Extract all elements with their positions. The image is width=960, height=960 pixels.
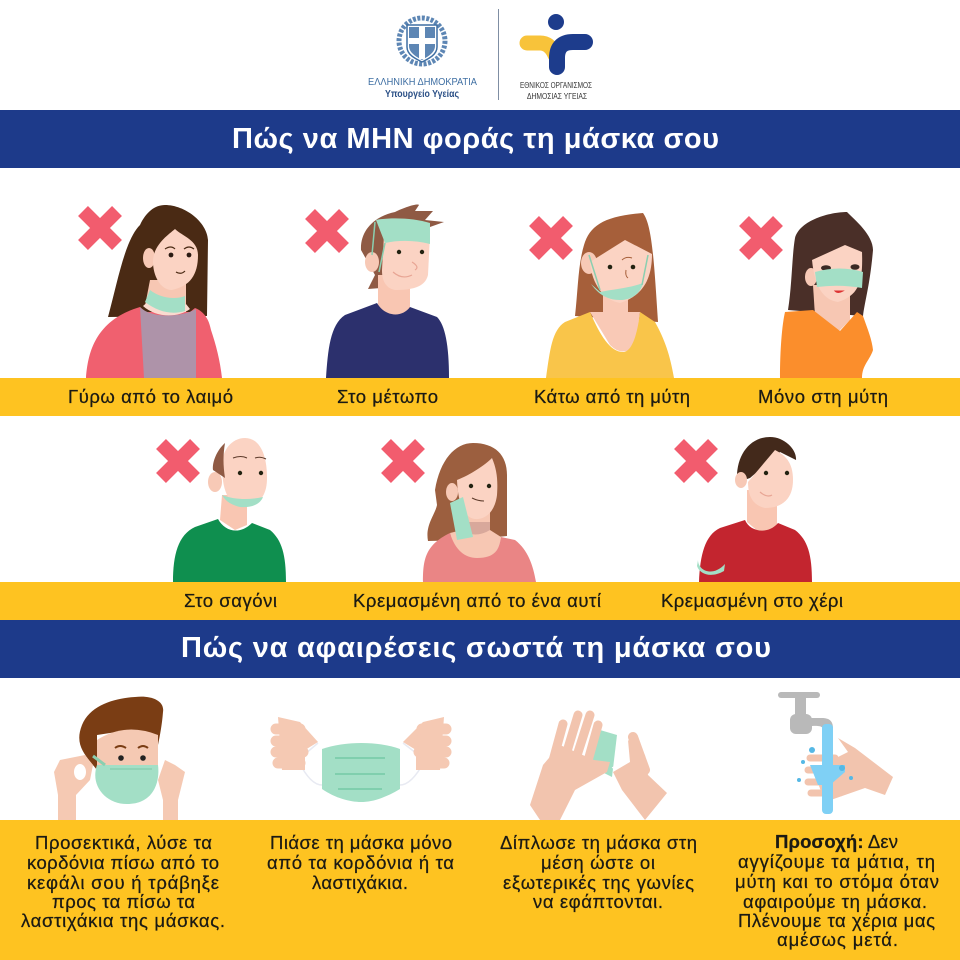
text: step 3: εξωτερικές της γωνίες [503,872,694,893]
icon: red cross [534,221,568,255]
text: step 1: κεφάλι σου ή τράβηξε [27,872,219,893]
person: mask on the arm [679,437,812,582]
text: step 1: λαστιχάκια της μάσκας. [21,910,225,931]
hanging mask [450,497,473,540]
text: step 3: μέση ώστε οι [541,852,655,873]
text: step 3 [500,832,697,912]
icon: red cross [679,444,713,478]
person: mask around the neck [83,205,222,378]
yellow label band: row 2: Στο σαγόνι [184,590,277,611]
text: step 1 [21,832,225,931]
yellow label band: row 2: Κρεμασμένη στο χέρι [661,590,843,611]
yellow label band: row 1: Μόνο στη μύτη [758,386,888,407]
text: step 3: Δίπλωσε τη μάσκα στη [500,832,697,853]
icon: red cross [386,444,420,478]
header: logos [368,9,592,101]
mask on nose [815,268,863,288]
text: step 1: Προσεκτικά, λύσε τα [35,832,212,853]
yellow label band: row 2: Κρεμασμένη από το ένα αυτί [353,590,601,611]
step 4: hand washing under tap [781,695,893,814]
text: warning: αμέσως μετά. [777,929,898,950]
mask on chin [222,495,263,507]
text: warning: αφαιρούμε τη μάσκα. [743,891,927,912]
icon: EODY logo [527,14,585,67]
step 2: hands holding mask by straps [276,717,446,802]
text: ministry name [368,76,477,100]
icon: red cross [161,444,195,478]
yellow label band: row 1: Στο μέτωπο [337,386,438,407]
step 3: hands folding mask [530,715,667,820]
yellow label band: row 1: Γύρω από το λαιμό [68,386,233,407]
step 1: man untying mask [54,697,185,820]
heading band: how not to wear [0,110,960,168]
mask below nose [591,283,643,300]
mask on forehead [376,218,430,244]
mask on neck [145,290,185,313]
text: step 2: λαστιχάκια. [312,872,408,893]
mask on arm [697,560,725,575]
text: ministry name: Υπουργείο Υγείας [385,89,459,100]
text: step 1: προς τα πίσω τα [52,891,195,912]
yellow label band: row 2 [0,582,960,620]
person: mask on the chin [161,438,286,582]
text: warning: Προσοχή: Δεν [775,831,898,852]
heading band: how to remove [0,620,960,678]
text: EODY name: ΕΘΝΙΚΟΣ ΟΡΓΑΝΙΣΜΟΣ [520,81,592,90]
icon: red cross [83,211,117,245]
person: mask under the nose [534,213,674,378]
text: step 2: Πιάσε τη μάσκα μόνο [270,832,452,853]
text: warning: αγγίζουμε τα μάτια, τη [738,851,935,872]
text: ministry name: ΕΛΛΗΝΙΚΗ ΔΗΜΟΚΡΑΤΙΑ [368,76,477,88]
text: EODY name: ΔΗΜΟΣΙΑΣ ΥΓΕΙΑΣ [527,92,587,101]
text: step 1: κορδόνια πίσω από το [27,852,219,873]
icon: Greek coat of arms [399,18,445,64]
icon: red cross [310,214,344,248]
text: step 2 [267,832,454,893]
text: warning: μύτη και το στόμα όταν [735,871,939,892]
text: step 2: από τα κορδόνια ή τα [267,852,454,873]
text: step 3: να εφάπτονται. [533,891,663,912]
heading band: how not to wear: Πώς να ΜΗΝ φοράς τη μάσκα σου [232,123,719,155]
text: warning [735,831,939,950]
yellow label band: row 1 [0,378,960,416]
person: mask hanging from one ear [386,443,536,582]
person: mask only on the nose [744,212,873,378]
text: warning: Πλένουμε τα χέρια μας [738,910,935,931]
yellow label band: row 1: Κάτω από τη μύτη [534,386,690,407]
icon: red cross [744,221,778,255]
heading band: how to remove: Πώς να αφαιρέσεις σωστά τη μάσκα σου [181,632,771,664]
text: EODY name [520,81,592,101]
person: mask on the forehead [310,204,449,378]
yellow instruction panel [0,820,960,960]
